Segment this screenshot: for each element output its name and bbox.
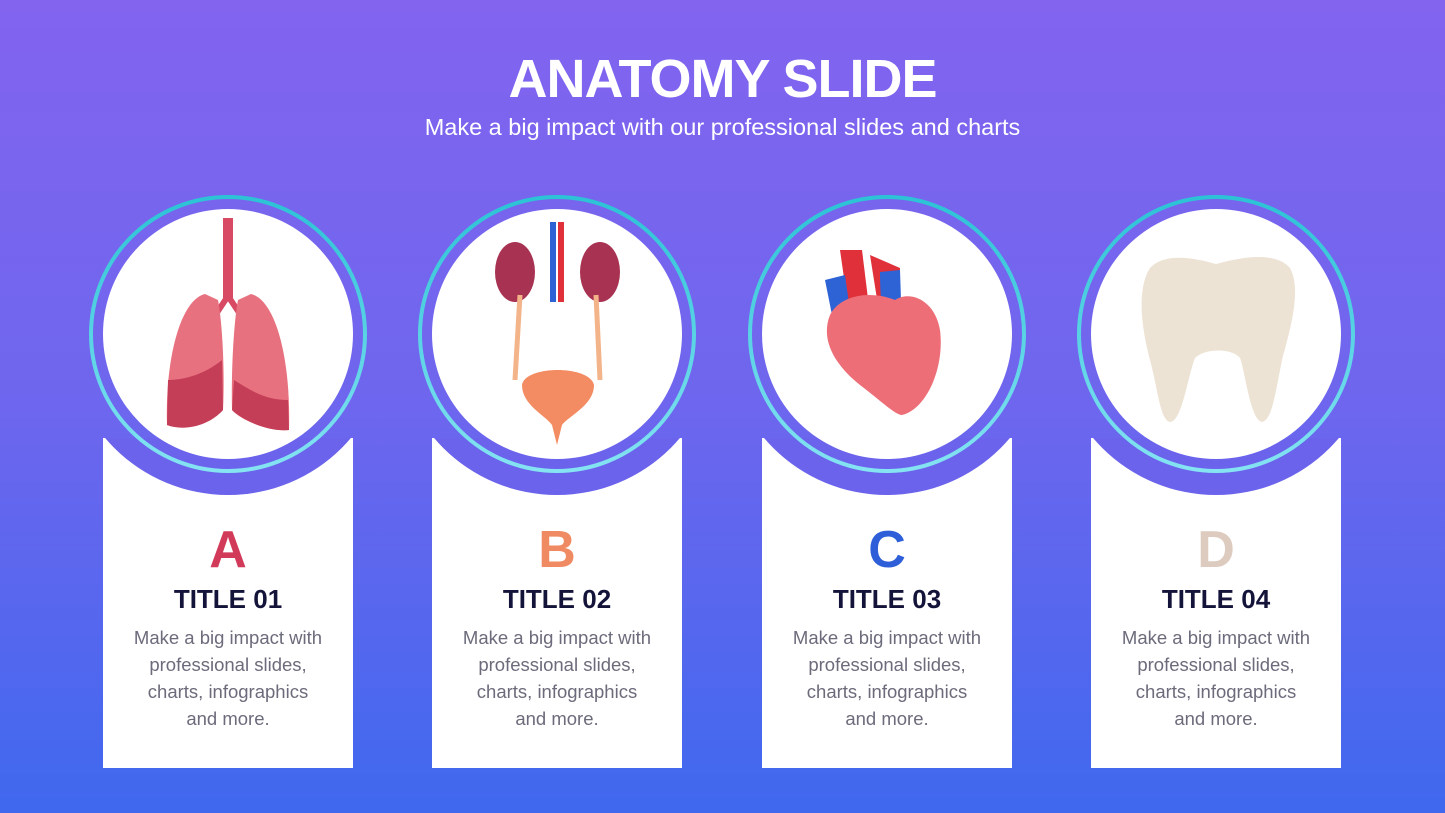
card C text: TITLE 03 [833, 584, 941, 614]
card B text: B [538, 521, 576, 579]
card A text: and more. [186, 708, 270, 729]
card D text [1122, 521, 1310, 729]
card C text: C [868, 521, 906, 579]
title: ANATOMY SLIDE [508, 49, 937, 109]
card C text: and more. [845, 708, 929, 729]
card A text: A [209, 521, 247, 579]
card B base [418, 195, 696, 768]
icon: lungs [167, 218, 289, 430]
card D text: charts, infographics [1136, 681, 1296, 702]
card B text [463, 521, 651, 729]
card B text: Make a big impact with [463, 627, 651, 648]
card D text: Make a big impact with [1122, 627, 1310, 648]
card D text: professional slides, [1137, 654, 1295, 675]
card A text: TITLE 01 [174, 584, 282, 614]
card A text: Make a big impact with [134, 627, 322, 648]
card D text: D [1197, 521, 1235, 579]
card C text: professional slides, [808, 654, 966, 675]
icon: tooth [1142, 257, 1295, 422]
card A text: professional slides, [149, 654, 307, 675]
card A text [134, 521, 322, 729]
card D text: TITLE 04 [1162, 584, 1270, 614]
icon: heart [825, 250, 941, 415]
card D text: and more. [1174, 708, 1258, 729]
card C base [748, 195, 1026, 768]
card B text: TITLE 02 [503, 584, 611, 614]
card C text: Make a big impact with [793, 627, 981, 648]
cards graphic [89, 195, 1355, 768]
card B text: professional slides, [478, 654, 636, 675]
card B text: charts, infographics [477, 681, 637, 702]
card D base [1077, 195, 1355, 768]
card A base [89, 195, 367, 768]
subtitle: Make a big impact with our professional slides and charts [425, 114, 1020, 140]
icon: kidneys and bladder [495, 222, 620, 445]
card C text: charts, infographics [807, 681, 967, 702]
card C text [793, 521, 981, 729]
card A text: charts, infographics [148, 681, 308, 702]
card B text: and more. [515, 708, 599, 729]
